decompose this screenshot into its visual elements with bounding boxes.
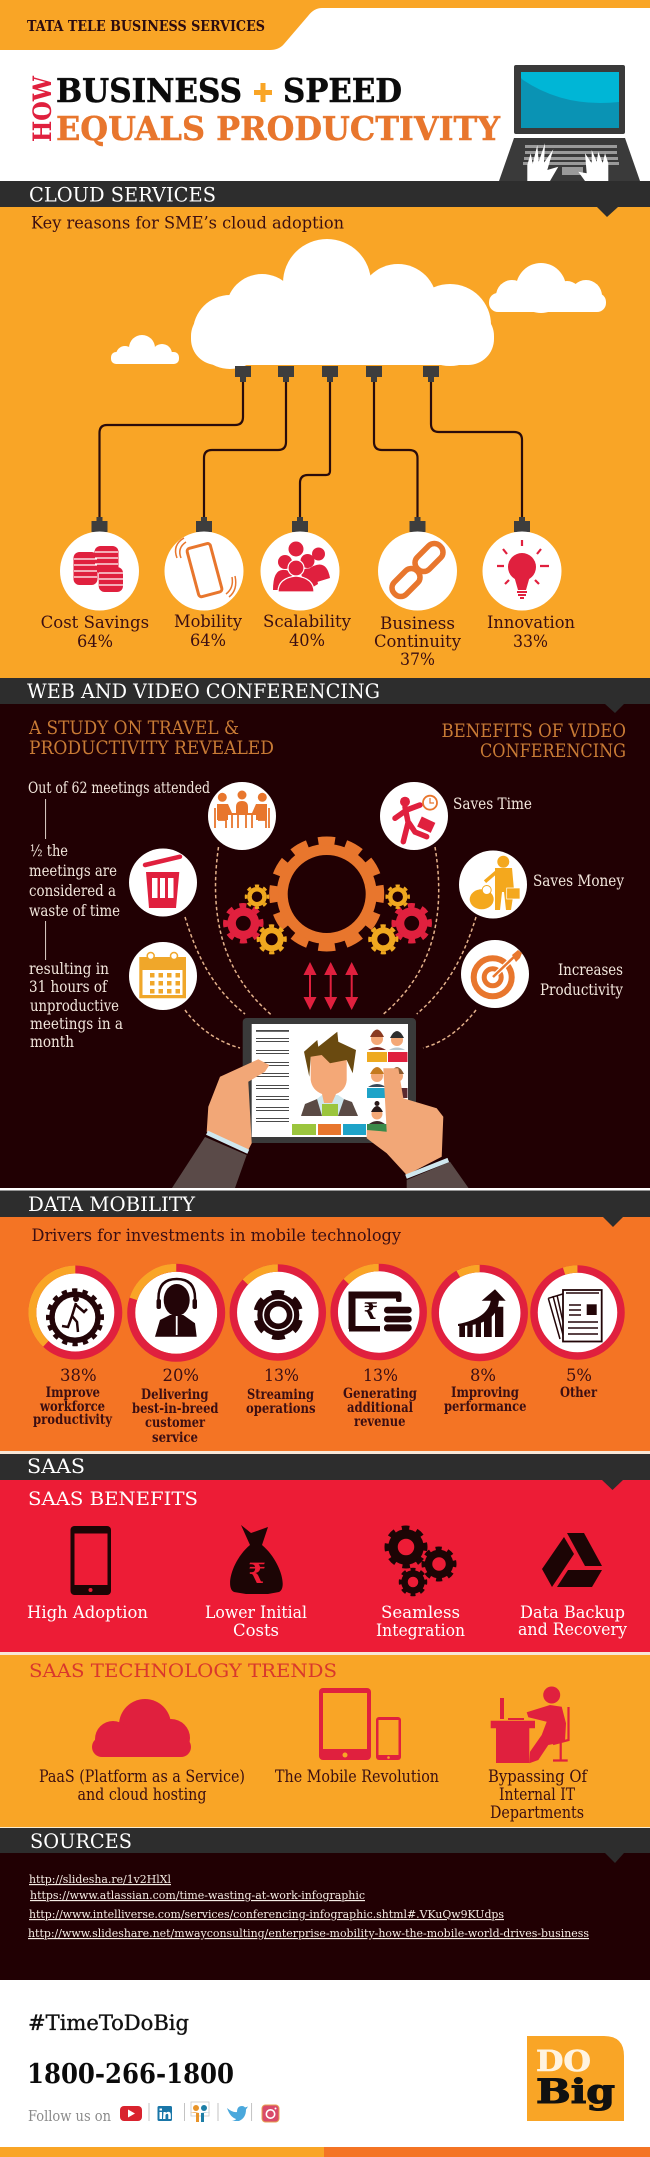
benefit labels: Saves Time: [453, 795, 532, 813]
item: innovation: 33%: [513, 632, 548, 652]
tablet video call: [172, 1018, 468, 1188]
ring: best-in-breed customer service: Delivering: [141, 1387, 209, 1403]
benefit labels: Productivity: [540, 981, 623, 999]
study text: meetings are: [29, 862, 117, 880]
item: scalability: [260, 532, 351, 651]
ring: improve workforce productivity: productivity: [33, 1412, 113, 1428]
saas benefits area: [0, 1454, 650, 1655]
panel: web and video conferencing: [0, 678, 650, 1188]
ring: generating additional revenue: Generating: [343, 1386, 417, 1402]
item: mobility: [164, 532, 244, 651]
trend labels: The Mobile Revolution: [275, 1767, 439, 1786]
main video person: [301, 1032, 358, 1116]
study text: ½ the: [30, 842, 68, 860]
study text: meetings in a: [30, 1015, 123, 1033]
ring: best-in-breed customer service: best-in-breed: [132, 1401, 219, 1417]
top cable plugs: [235, 366, 439, 382]
item: cost savings: [41, 532, 149, 652]
section header: [0, 1190, 650, 1227]
item: cost savings: 64%: [77, 632, 113, 652]
hashtag: #TimeToDoBig: [28, 2011, 189, 2035]
icon: linkedin: [158, 2106, 172, 2121]
ring: other: Other: [560, 1385, 598, 1401]
brand tab: [0, 0, 650, 50]
section header: DATA MOBILITY: [28, 1192, 196, 1216]
section header: SOURCES: [30, 1829, 132, 1853]
study text: [28, 779, 210, 1051]
study text: 31 hours of: [29, 978, 108, 996]
brand name: TATA TELE BUSINESS SERVICES: [27, 18, 265, 35]
benefit labels: Integration: [376, 1621, 465, 1641]
item: business continuity: Continuity: [374, 632, 461, 652]
item: mobility: Mobility: [174, 612, 242, 632]
section header: [0, 181, 650, 217]
ring: streaming operations: 13%: [264, 1366, 299, 1386]
title: SPEED: [283, 71, 402, 110]
social separators: [149, 2103, 252, 2121]
ring: best-in-breed customer service: 20%: [162, 1366, 199, 1386]
icon: coins: [74, 546, 123, 592]
logo: do big: [527, 2036, 624, 2121]
social icons: [120, 2102, 279, 2122]
red gear right: [394, 905, 430, 941]
icon: slideshare: [190, 2102, 210, 2122]
icon: newspaper: [548, 1290, 602, 1342]
icon: integration gears: [387, 1528, 454, 1594]
source links: https://www.atlassian.com/time-wasting-at-work-infographic: [30, 1888, 365, 1902]
panel: footer: [0, 2011, 650, 2157]
icon: smartphone: [70, 1526, 111, 1595]
subheading: Key reasons for SME’s cloud adoption: [31, 214, 344, 232]
heading: study: [28, 717, 274, 759]
subheading: Drivers for investments in mobile technology: [32, 1226, 401, 1246]
medium cloud right: [489, 263, 606, 313]
source links: http://www.intelliverse.com/services/conferencing-infographic.shtml#.VKuQw9KUdps: [29, 1907, 504, 1921]
section header: SAAS: [27, 1454, 85, 1478]
big orange gear: [274, 841, 380, 947]
icon: waste bin: [129, 848, 197, 916]
icon: person at desk: [491, 1686, 568, 1763]
icon: growth chart: [458, 1289, 506, 1337]
ring: generating additional revenue: revenue: [354, 1414, 406, 1430]
benefit labels: [453, 795, 624, 999]
red gear left: [225, 905, 261, 941]
source links: http://www.slideshare.net/mwayconsulting/enterprise-mobility-how-the-mobile-world-drives-business: [28, 1926, 589, 1940]
logo: do big: Big: [536, 2072, 615, 2112]
icon: tablet and phone: [319, 1688, 401, 1760]
icon: youtube: [120, 2106, 142, 2121]
yellow gears: [246, 886, 409, 953]
section header: WEB AND VIDEO CONFERENCING: [27, 679, 380, 703]
icon: rupee cash: ₹: [363, 1298, 378, 1325]
trend labels: Bypassing Of: [488, 1767, 588, 1786]
icon: vibrating phone: [176, 538, 236, 597]
ring: generating additional revenue: [316, 1249, 442, 1430]
panel: data mobility: [0, 1190, 650, 1451]
study text: Out of 62 meetings attended: [28, 779, 210, 797]
follow us label: Follow us on: [28, 2107, 111, 2125]
ring: other: [523, 1258, 632, 1401]
ring: improving performance: performance: [444, 1399, 527, 1415]
icon: money bag: ₹: [248, 1557, 266, 1590]
section header: [0, 1828, 650, 1863]
trend labels: PaaS (Platform as a Service): [39, 1767, 245, 1786]
saas trends area: [0, 1655, 650, 1828]
dashed connectors: [185, 847, 476, 1048]
heading: saas trends: SAAS TECHNOLOGY TRENDS: [29, 1660, 337, 1682]
left hand and sleeve: [172, 1059, 269, 1188]
heading: study: PRODUCTIVITY REVEALED: [29, 737, 274, 759]
heading: saas benefits: SAAS BENEFITS: [28, 1488, 198, 1510]
item: business continuity: 37%: [400, 650, 435, 670]
item: mobility: 64%: [190, 631, 226, 651]
title: EQUALS PRODUCTIVITY: [56, 109, 501, 148]
source links: http://slidesha.re/1v2HlXl: [29, 1872, 171, 1886]
ring: streaming operations: [215, 1250, 341, 1417]
ring: generating additional revenue: additional: [347, 1400, 413, 1416]
bottom colour band: [0, 2147, 650, 2157]
icon: red cloud: [92, 1699, 191, 1757]
icon: instagram: [262, 2105, 279, 2122]
bottom cable plugs: [92, 517, 530, 532]
benefit labels: Lower Initial: [205, 1603, 307, 1623]
icon: light bulb: [497, 540, 549, 598]
ring: streaming operations: Streaming: [247, 1387, 314, 1403]
benefit labels: High Adoption: [27, 1603, 148, 1623]
source links: [28, 1872, 589, 1940]
icon: target: [461, 940, 529, 1008]
item: innovation: [482, 532, 575, 652]
icon: running late: [380, 782, 448, 850]
section header: [0, 1454, 650, 1490]
icon: gear with runner: [48, 1290, 102, 1344]
phone number: 1800-266-1800: [27, 2059, 234, 2090]
study text: unproductive: [30, 997, 119, 1015]
ring: improving performance: Improving: [451, 1385, 519, 1401]
study text: month: [30, 1033, 74, 1051]
study text: considered a: [29, 882, 116, 900]
participant thumbnails: [367, 1030, 408, 1124]
icon: money bag: [230, 1525, 283, 1594]
heading: benefits: CONFERENCING: [480, 740, 626, 762]
icon: rupee cash: [349, 1292, 412, 1332]
panel: masthead: [0, 0, 650, 181]
bottom colour tiles: [292, 1124, 387, 1135]
main cloud: [191, 239, 494, 369]
title: BUSINESS: [56, 71, 242, 110]
small cloud left: [111, 335, 179, 364]
item: business continuity: [374, 532, 461, 670]
item: scalability: 40%: [289, 631, 325, 651]
trend labels: Internal IT: [499, 1785, 575, 1804]
ring: streaming operations: operations: [246, 1401, 316, 1417]
ring: best-in-breed customer service: [119, 1256, 233, 1446]
icon: people group: [273, 542, 330, 592]
heading: study: A STUDY ON TRAVEL &: [28, 717, 239, 739]
trend labels: [39, 1767, 588, 1822]
item: cost savings: Cost Savings: [41, 613, 149, 633]
item: innovation: Innovation: [487, 613, 575, 633]
trend labels: and cloud hosting: [78, 1785, 207, 1804]
ring: generating additional revenue: 13%: [363, 1366, 398, 1386]
icon: calendar: [129, 942, 197, 1010]
study text: waste of time: [29, 902, 120, 920]
ring: improve workforce productivity: Improve: [46, 1385, 100, 1401]
trend labels: Departments: [490, 1803, 584, 1822]
heading: benefits: BENEFITS OF VIDEO: [442, 720, 626, 742]
connector wires: [100, 382, 522, 517]
benefit labels: Costs: [233, 1621, 279, 1641]
icon: saves money: [459, 850, 527, 918]
title: HOW: [28, 75, 57, 142]
icon: meeting: [208, 782, 276, 850]
document text lines: [256, 1030, 289, 1122]
icon: twitter: [227, 2106, 248, 2121]
right hand and sleeve: [367, 1068, 468, 1188]
ring: improve workforce productivity: 38%: [60, 1366, 97, 1386]
section header: [0, 678, 650, 713]
icon: headset agent: [155, 1279, 197, 1337]
ring: improve workforce productivity: workforce: [39, 1399, 105, 1415]
ring: improve workforce productivity: [15, 1252, 136, 1428]
icon: chain link: [389, 540, 446, 600]
ring: improving performance: [419, 1253, 540, 1415]
logo: do big: DO: [536, 2044, 591, 2078]
benefit labels: Saves Money: [533, 872, 624, 890]
panel: sources: [0, 1828, 650, 1980]
title: [28, 71, 501, 148]
icon: cloud drive: [542, 1533, 602, 1587]
benefit labels: [27, 1603, 627, 1641]
benefit labels: and Recovery: [518, 1620, 627, 1640]
ring: other: 5%: [566, 1366, 592, 1386]
ring: improving performance: 8%: [470, 1366, 496, 1386]
small cloud right top: [419, 306, 470, 334]
section header: CLOUD SERVICES: [29, 182, 216, 206]
red double arrows: [304, 962, 358, 1010]
ring: best-in-breed customer service: customer: [145, 1415, 206, 1431]
benefit labels: Increases: [558, 961, 623, 979]
icon: laptop: [499, 65, 640, 181]
icon: cog: [256, 1292, 301, 1338]
item: business continuity: Business: [380, 614, 455, 634]
ring: best-in-breed customer service: service: [152, 1430, 198, 1446]
panel: saas: [0, 1451, 650, 1828]
heading: benefits: [442, 720, 626, 762]
benefit labels: Data Backup: [520, 1603, 625, 1623]
benefit labels: Seamless: [381, 1603, 460, 1623]
study text: resulting in: [29, 960, 109, 978]
panel: cloud services: [0, 181, 650, 678]
item: scalability: Scalability: [263, 612, 351, 632]
